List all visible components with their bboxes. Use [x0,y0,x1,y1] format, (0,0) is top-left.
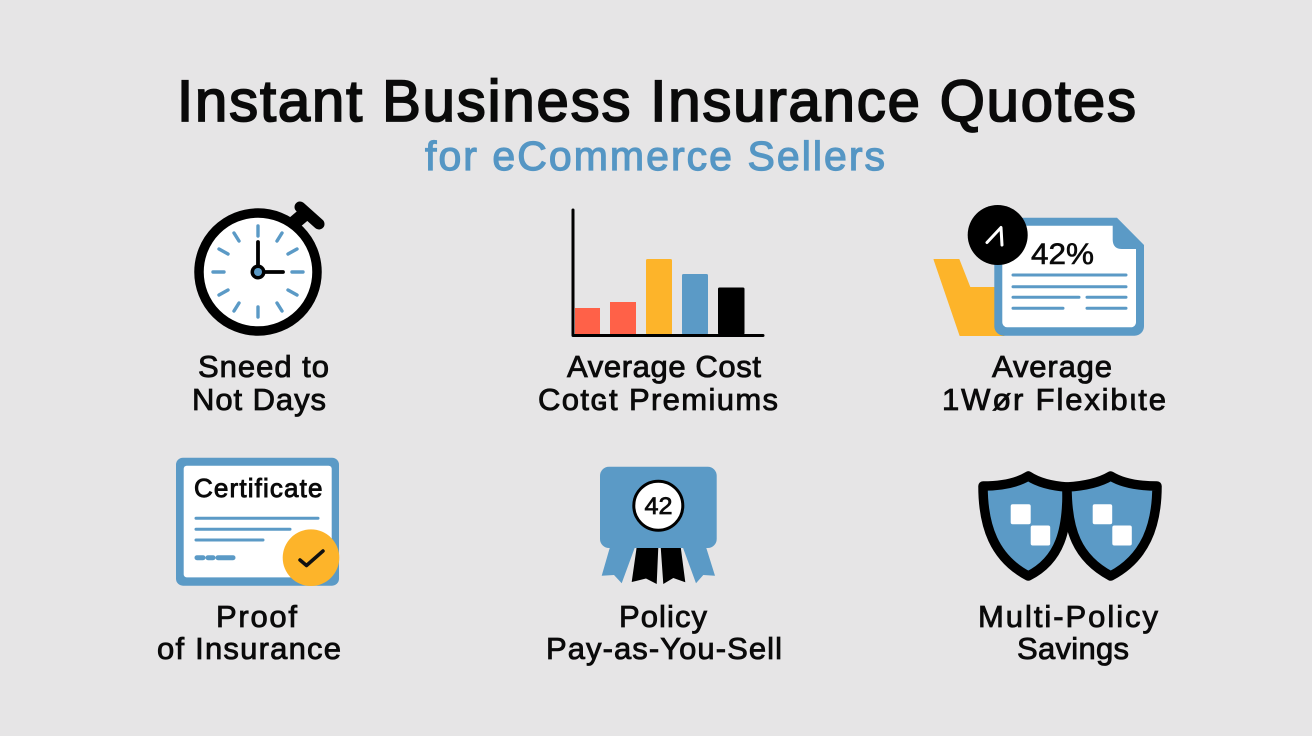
label: speed: Sneed to [198,349,329,384]
panel: pay as you sell [546,467,782,666]
label: proof of insurance: Proof [216,599,297,634]
label: average cost [538,349,778,417]
label: multi-policy savings: Savings [1017,631,1129,666]
label: pay as you sell [546,599,782,666]
icon: certificate [176,458,339,586]
panel: multi-policy savings [978,476,1158,666]
bar chart [573,210,763,336]
text: 42%: 42% [1031,238,1094,271]
text: certificate: Certificate [194,473,322,503]
icon: folder and document [934,205,1144,336]
title: Instant Business Insurance Quotes [177,69,1136,134]
label: average cost: Cotɢt Premiums [538,382,778,417]
label: proof of insurance [157,599,341,666]
icon: arrow badge [968,205,1028,265]
label: proof of insurance: of Insurance [157,631,341,666]
text: 42: 42 [644,493,672,520]
icon: stopwatch [199,207,319,331]
subtitle: for eCommerce Sellers [425,133,885,179]
panel: proof of insurance [157,458,341,666]
label: average cost: Average Cost [567,349,761,384]
panel: average cost [538,210,778,417]
label: multi-policy savings: Multi-Policy [978,599,1158,634]
label: multi-policy savings [978,599,1158,666]
icon: twin shields [983,476,1157,576]
label: flexibility: Average [992,349,1112,384]
label: flexibility [942,349,1166,417]
icon: ribbon badge [600,467,717,584]
label: pay as you sell: Pay-as-You-Sell [546,631,782,666]
label: pay as you sell: Policy [619,599,708,634]
label: flexibility: 1Wør Flexibιte [942,382,1166,417]
label: speed: Not Days [192,382,326,417]
panel: speed [192,207,329,417]
label: speed [192,349,329,417]
icon: check badge [283,529,339,586]
panel: flexibility [934,205,1166,417]
